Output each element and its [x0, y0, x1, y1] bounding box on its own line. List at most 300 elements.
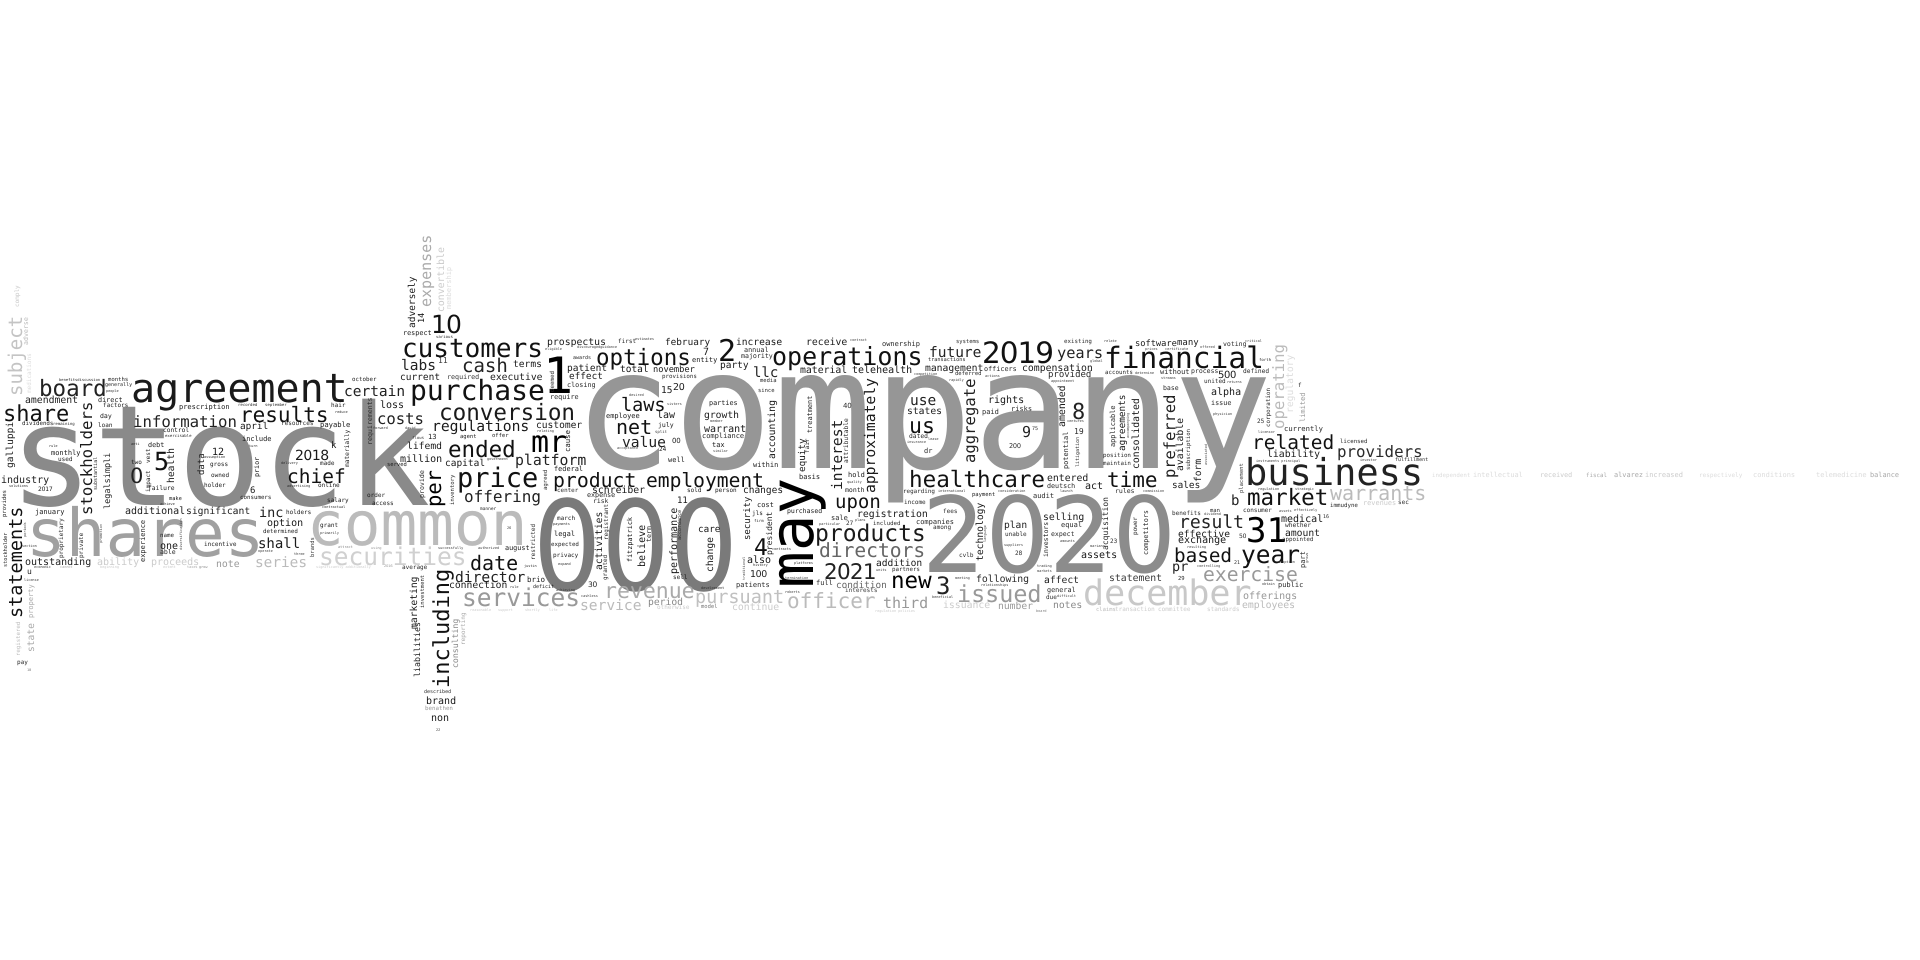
- small words: upper middle block: 11: [677, 496, 688, 506]
- small words: upper middle block: july: [658, 421, 674, 429]
- small words: upper right block: competition: [914, 372, 937, 376]
- small words: lower middle block: liabilities: [412, 622, 422, 677]
- small words: upper middle block: lifemd: [407, 441, 442, 452]
- small words: upper middle block: sold: [687, 487, 702, 494]
- small words: lower middle block: restricted: [530, 523, 537, 560]
- word: services: services: [462, 583, 580, 612]
- small words: left block: provides: [1, 490, 8, 517]
- small words: lower middle block: difficult: [1057, 594, 1076, 598]
- small words: lower middle block: officer: [787, 589, 876, 613]
- small words: lower middle block: fees: [943, 508, 958, 515]
- small words: left block: galluppi: [5, 422, 16, 468]
- small words: upper middle block: current: [400, 372, 440, 383]
- small words: right block: revenues: [1363, 499, 1396, 507]
- small words: lower middle block: director: [455, 569, 526, 586]
- small words: upper middle block: 10: [431, 310, 461, 339]
- small words: lower middle block: 30: [588, 580, 598, 589]
- small words: lower middle block: mariano: [1090, 544, 1105, 548]
- small words: right block: licensed: [1340, 438, 1367, 445]
- small words: lower middle block: competitors: [1142, 510, 1150, 555]
- small words: right block: obtain: [1262, 582, 1275, 586]
- small words: upper middle block: million: [400, 454, 442, 465]
- word: issued: issued: [957, 580, 1042, 608]
- small words: left block: medications: [26, 353, 33, 393]
- small words: right block: 16: [1323, 514, 1329, 520]
- small words: left block: consumers: [240, 495, 271, 501]
- small words: upper middle block: llc: [753, 365, 778, 381]
- small words: left block: assumption: [204, 455, 225, 459]
- small words: upper middle block: relating: [537, 429, 554, 433]
- small words: left block: three: [294, 552, 305, 556]
- small words: lower middle block: power: [1132, 517, 1139, 535]
- small words: upper right block: 8: [1072, 400, 1085, 425]
- small words: left block: able: [160, 548, 176, 556]
- small words: upper right block: forth: [1259, 357, 1272, 362]
- small words: far right strip: received: [1540, 471, 1572, 479]
- small words: upper middle block: membership: [445, 267, 453, 309]
- small words: lower middle block: 23: [1110, 538, 1118, 545]
- small words: right block: providers: [1337, 442, 1423, 461]
- small words: left block: 6: [250, 486, 255, 496]
- small words: lower middle block: support: [498, 608, 513, 612]
- small words: left block: promotion: [99, 524, 103, 543]
- small words: lower middle block: date: [470, 551, 518, 575]
- small words: left block: recorded: [238, 402, 258, 407]
- small words: lower middle block: march: [557, 515, 575, 522]
- small words: lower middle block: assets: [1081, 550, 1117, 561]
- word: price: price: [457, 463, 538, 494]
- small words: upper right block: officers: [984, 365, 1017, 373]
- word: purchase: purchase: [410, 374, 545, 407]
- small words: upper right block: voting: [1223, 340, 1247, 348]
- small words: lower middle block: following: [976, 574, 1029, 585]
- small words: upper middle block: attributable: [843, 418, 850, 463]
- small words: right block: based: [1174, 544, 1232, 567]
- small words: left block: property: [27, 584, 35, 618]
- small words: left block: additional: [125, 506, 185, 517]
- small words: upper middle block: split: [655, 429, 668, 434]
- small words: upper middle block: manner: [480, 507, 497, 512]
- small words: lower middle block: number: [998, 601, 1033, 612]
- small words: lower middle block: international: [938, 489, 965, 493]
- small words: left block: materially: [344, 429, 351, 467]
- small words: upper middle block: tax: [712, 441, 725, 449]
- small words: right block: warrants: [1330, 481, 1426, 505]
- small words: left block: health: [166, 448, 177, 483]
- small words: upper middle block: compliance: [702, 432, 744, 440]
- small words: upper right block: issue: [1211, 399, 1231, 407]
- small words: lower middle block: payments: [553, 522, 570, 526]
- small words: left block: license: [24, 578, 39, 582]
- small words: upper middle block: within: [753, 461, 778, 469]
- small words: upper right block: audit: [1033, 492, 1054, 500]
- small words: upper right block: base: [1163, 384, 1179, 392]
- small words: upper right block: entered: [1047, 473, 1088, 484]
- small words: lower middle block: payment: [972, 492, 995, 498]
- small words: lower middle block: beneficial: [932, 595, 953, 599]
- small words: upper right block: paid: [982, 408, 999, 416]
- small words: upper right block: deutsch: [1047, 482, 1075, 490]
- small words: lower middle block: markets: [1037, 569, 1052, 573]
- small words: left block: failure: [148, 485, 175, 492]
- small words: upper right block: physician: [1213, 412, 1232, 416]
- small words: right block: effective: [1178, 529, 1230, 540]
- small words: left block: hair: [331, 402, 346, 409]
- small words: right block: liability: [1267, 449, 1320, 460]
- small words: right block: investor: [1360, 458, 1377, 462]
- small words: lower middle block: shortly: [525, 608, 540, 612]
- word: financial: financial: [1104, 341, 1264, 375]
- small words: left block: adverse: [22, 317, 30, 345]
- small words: left block: requirements: [366, 397, 374, 445]
- small words: left block: significantly additionally: [316, 565, 371, 569]
- small words: upper middle block: sisters: [667, 402, 682, 406]
- small words: lower middle block: condition: [836, 580, 887, 591]
- small words: lower middle block: described: [424, 689, 451, 695]
- small words: right block: b: [1231, 493, 1239, 509]
- small words: lower middle block: history: [753, 563, 768, 567]
- small words: lower middle block: brio: [527, 575, 546, 584]
- small words: upper middle block: ended: [448, 437, 516, 463]
- small words: left block: significant: [186, 506, 250, 517]
- small words: left block: impact: [145, 470, 152, 492]
- small words: left block: prior: [253, 457, 261, 477]
- small words: upper middle block: require: [550, 393, 579, 401]
- small words: left block: remaining: [53, 421, 75, 426]
- small words: left block: holders: [286, 509, 312, 516]
- small words: right block: exchange: [1178, 535, 1226, 546]
- small words: upper middle block: month: [845, 486, 865, 494]
- small words: left block: attract: [338, 545, 353, 549]
- small words: far right strip: increased: [1645, 471, 1683, 479]
- small words: left block: share: [3, 402, 69, 427]
- small words: lower middle block: expect: [1051, 530, 1075, 538]
- small words: upper middle block: closing: [567, 381, 596, 389]
- small words: lower middle block: justin: [524, 564, 537, 568]
- word: company: company: [573, 315, 1273, 508]
- small words: right block: consumer: [1243, 507, 1272, 514]
- word: statements: statements: [6, 507, 27, 618]
- small words: lower middle block: companies: [916, 518, 954, 526]
- small words: upper middle block: receive: [806, 337, 847, 348]
- small words: upper middle block: estimates: [635, 337, 654, 341]
- small words: upper right block: actions: [985, 374, 1000, 378]
- small words: lower middle block: directors: [819, 539, 925, 562]
- small words: lower middle block: deficit: [533, 584, 554, 590]
- small words: upper middle block: law: [657, 410, 676, 421]
- small words: lower middle block: notes: [1053, 600, 1082, 611]
- small words: far right strip: conditions: [1753, 471, 1795, 479]
- word: including: including: [430, 569, 455, 688]
- small words: lower middle block: sale: [831, 514, 848, 522]
- small words: left block: proprietary: [58, 518, 65, 558]
- word: december: december: [1083, 574, 1252, 614]
- small words: upper middle block: options: [596, 345, 691, 371]
- small words: right block: regulatory: [1285, 355, 1296, 413]
- small words: upper middle block: terms: [513, 359, 542, 370]
- small words: left block: resources: [281, 420, 314, 427]
- small words: right block: placement: [1238, 463, 1245, 493]
- small words: upper right block: use: [910, 393, 936, 409]
- small words: right block: controlling: [1197, 564, 1220, 568]
- small words: left block: october: [352, 376, 377, 383]
- small words: left block: state: [26, 623, 37, 652]
- small words: left block: monthly: [51, 449, 81, 457]
- small words: upper right block: risks: [1011, 405, 1032, 413]
- small words: upper middle block: respect: [403, 329, 432, 337]
- small words: left block: brands: [309, 537, 316, 557]
- small words: right block: appointed: [1282, 536, 1313, 543]
- small words: left block: extent: [163, 565, 176, 569]
- small words: upper middle block: executive: [490, 372, 543, 383]
- small words: lower middle block: registration: [857, 509, 928, 520]
- small words: upper right block: insurance: [907, 440, 926, 444]
- small words: lower middle block: also: [747, 555, 771, 566]
- small words: lower middle block: plan: [1004, 520, 1027, 531]
- small words: lower middle block: august: [505, 544, 530, 552]
- small words: left block: 0: [130, 464, 143, 488]
- small words: left block: used: [58, 456, 73, 463]
- small words: upper middle block: cause: [563, 430, 572, 452]
- small words: lower middle block: reasonable: [470, 608, 491, 612]
- small words: upper right block: streams: [1161, 376, 1176, 380]
- small words: lower middle block: sell: [673, 574, 688, 581]
- word: securities: securities: [319, 542, 467, 571]
- small words: upper middle block: treatment: [806, 396, 814, 433]
- small words: left block: made: [320, 460, 335, 467]
- small words: lower middle block: patients: [736, 581, 770, 589]
- small words: lower middle block: rule: [510, 585, 518, 589]
- small words: left block: legalsimpli: [103, 453, 113, 509]
- small words: upper middle block: various: [436, 334, 453, 339]
- small words: left block: pay: [17, 659, 28, 666]
- small words: upper middle block: convertible: [436, 247, 447, 312]
- small words: upper middle block: labs: [401, 358, 436, 374]
- small words: upper middle block: inventory: [449, 474, 456, 505]
- small words: upper right block: 75: [1032, 426, 1038, 432]
- small words: upper right block: associated: [1204, 444, 1208, 465]
- small words: upper right block: future: [929, 345, 981, 361]
- small words: lower middle block: change: [705, 537, 716, 572]
- word: 2019: 2019: [982, 336, 1053, 370]
- small words: upper right block: act: [1085, 481, 1103, 492]
- small words: lower middle block: general: [1047, 586, 1076, 594]
- small words: lower middle block: full: [816, 579, 833, 587]
- small words: right block: pr: [1172, 559, 1188, 575]
- small words: left block: benefitsdiscussion: [59, 377, 100, 382]
- small words: upper right block: applicable: [1109, 406, 1117, 447]
- small words: lower middle block: expected: [551, 541, 579, 548]
- small words: left block: primarily: [320, 531, 339, 535]
- small words: upper right block: defined: [1243, 368, 1269, 375]
- small words: upper middle block: laws: [621, 395, 666, 416]
- small words: upper right block: 9: [1022, 423, 1031, 441]
- small words: right block: medical: [1281, 514, 1323, 525]
- small words: lower middle block: successfully: [438, 546, 463, 550]
- small words: left block: option: [267, 518, 303, 529]
- small words: lower middle block: service: [580, 597, 642, 614]
- small words: left block: diversification: [179, 518, 183, 550]
- small words: left block: board: [39, 376, 107, 402]
- small words: lower middle block: suppliers: [1004, 543, 1023, 547]
- small words: right block: 50: [1239, 533, 1247, 540]
- small words: upper middle block: employee: [606, 412, 640, 420]
- small words: upper right block: determine: [1135, 371, 1154, 375]
- small words: lower middle block: particular: [819, 522, 840, 526]
- small words: lower middle block: achieving: [556, 588, 575, 592]
- small words: lower middle block: care: [698, 524, 721, 535]
- small words: lower middle block: statement: [1109, 573, 1162, 584]
- small words: upper right block: existing: [1064, 338, 1092, 345]
- small words: upper middle block: regulations: [432, 418, 529, 435]
- small words: upper middle block: risk: [593, 497, 609, 505]
- small words: upper middle block: flows: [412, 435, 425, 440]
- small words: upper right block: compensation: [1022, 363, 1093, 374]
- small words: left block: online: [318, 482, 340, 489]
- small words: left block: months: [108, 376, 128, 383]
- small words: upper middle block: equity: [797, 438, 808, 472]
- small words: lower middle block: privacy: [553, 552, 579, 559]
- small words: left block: experience: [139, 520, 147, 562]
- small words: left block: private: [78, 532, 85, 558]
- small words: left block: loss: [380, 400, 404, 411]
- small words: lower middle block: reporting: [460, 612, 467, 645]
- small words: lower middle block: fitzpatrick: [626, 517, 634, 562]
- small words: lower middle block: granted: [602, 554, 609, 580]
- small words: lower middle block: units: [876, 568, 887, 572]
- small words: lower middle block: benathen: [425, 705, 453, 712]
- small words: left block: served: [387, 461, 407, 468]
- small words: left block: k: [331, 441, 337, 451]
- small words: upper middle block: upon: [835, 491, 881, 513]
- small words: upper right block: aggregate: [961, 378, 979, 463]
- small words: right block: public: [1278, 581, 1303, 589]
- small words: left block: chief: [287, 465, 346, 488]
- small words: right block: currently: [1284, 424, 1324, 433]
- small words: left block: include: [242, 435, 272, 443]
- small words: right block: adoption: [1278, 560, 1295, 564]
- small words: upper middle block: first: [618, 338, 636, 345]
- small words: upper right block: critical: [1245, 339, 1262, 343]
- small words: left block: stockholder: [3, 533, 9, 567]
- small words: lower middle block: jls: [752, 510, 763, 517]
- small words: upper middle block: prospectus: [547, 337, 606, 348]
- small words: lower middle block: 28: [1015, 550, 1023, 557]
- small words: left block: results: [240, 403, 329, 427]
- small words: right block: corporation: [1265, 388, 1272, 427]
- small words: lower middle block: language: [983, 525, 987, 542]
- small words: lower middle block: investment: [419, 575, 426, 608]
- small words: left block: amendment: [25, 395, 78, 406]
- small words: upper right block: potential: [1062, 432, 1070, 469]
- small words: upper right block: offered: [1200, 345, 1215, 349]
- small words: left block: one: [160, 541, 178, 552]
- small words: lower middle block: term: [645, 526, 653, 542]
- small words: right block: offerings: [1243, 591, 1297, 602]
- small words: upper right block: consolidated: [1131, 398, 1142, 469]
- small words: upper middle block: adversely: [407, 276, 418, 328]
- small words: left block: factors: [103, 402, 129, 409]
- small words: upper middle block: required: [447, 373, 479, 381]
- small words: left block: using: [371, 546, 382, 550]
- small words: upper right block: available: [1175, 418, 1186, 471]
- small words: lower middle block: 27: [846, 520, 854, 527]
- small words: right block: [1172, 344, 1428, 611]
- small words: lower middle block: consulting: [450, 619, 460, 668]
- small words: upper middle block: awards: [573, 355, 591, 361]
- word: common: common: [307, 489, 527, 560]
- small words: upper right block: sales: [1172, 480, 1200, 491]
- small words: upper middle block: hold: [848, 471, 865, 479]
- small words: lower middle block: cost: [757, 501, 774, 509]
- small words: left block: april: [240, 421, 268, 432]
- small words: left block: determined: [263, 528, 298, 535]
- small words: lower middle block: pursuant: [695, 587, 784, 608]
- small words: upper middle block: person: [715, 487, 737, 494]
- small words: lower middle block: consideration: [998, 489, 1025, 493]
- small words: upper middle block: agent: [460, 434, 477, 440]
- small words: left block: september: [265, 402, 287, 407]
- small words: lower middle block: issuance: [943, 600, 990, 611]
- small words: left block: owned: [211, 472, 229, 479]
- small words: left block: note: [216, 559, 240, 570]
- small words: upper middle block: eligible: [545, 347, 562, 351]
- small words: upper right block: prices: [1145, 347, 1158, 351]
- small words: upper middle block: since: [758, 387, 775, 394]
- small words: right block: man: [1210, 508, 1220, 514]
- small words: left block: certain: [344, 384, 405, 400]
- small words: lower middle block: investors: [1042, 522, 1050, 557]
- small words: lower middle block: brand: [426, 696, 456, 707]
- small words: far right strip: balance: [1870, 471, 1899, 479]
- small words: upper right block: rules: [1115, 487, 1135, 495]
- small words: left block: industry: [1, 475, 49, 486]
- small words: left block: payable: [320, 420, 350, 429]
- word: 31: 31: [1246, 511, 1287, 551]
- small words: lower middle block: period: [648, 597, 683, 608]
- small words: left block: exercisable: [165, 433, 192, 438]
- small words: left block: dividends: [22, 420, 53, 427]
- small words: left block: beginning: [100, 565, 119, 569]
- small words: left block: contractual: [322, 505, 345, 509]
- small words: right block: operating: [1269, 344, 1288, 429]
- small words: left block: name: [160, 533, 174, 539]
- small words: upper middle block: platform: [515, 452, 586, 469]
- word: 1: 1: [543, 347, 573, 405]
- small words: lower middle block: commission: [1143, 489, 1164, 493]
- small words: left block: reduce: [335, 410, 348, 414]
- small words: lower middle block: president: [765, 511, 774, 555]
- small words: right block: assets: [1279, 509, 1292, 513]
- small words: upper right block: dated: [909, 433, 928, 440]
- small words: lower middle block: plans: [855, 518, 866, 522]
- small words: right block: strategic: [1295, 487, 1314, 491]
- small words: far right strip: independent: [1432, 472, 1470, 479]
- small words: upper right block: litigation: [1075, 437, 1081, 467]
- small words: right block: dividend: [1204, 512, 1221, 516]
- small words: lower middle block: model: [701, 603, 718, 610]
- small words: lower middle block: committee: [1158, 606, 1191, 613]
- word: 2020: 2020: [922, 475, 1176, 597]
- small words: right block: grows: [1305, 552, 1309, 563]
- small words: lower middle block: selling: [1043, 512, 1084, 523]
- small words: lower middle block: regulation policies: [875, 609, 915, 613]
- small words: left block: stockholders: [77, 402, 96, 515]
- small words: upper middle block: employment: [646, 469, 764, 492]
- small words: left block: outstanding: [25, 557, 91, 568]
- small words: left block: two: [131, 459, 142, 466]
- small words: left block: comply: [14, 285, 21, 307]
